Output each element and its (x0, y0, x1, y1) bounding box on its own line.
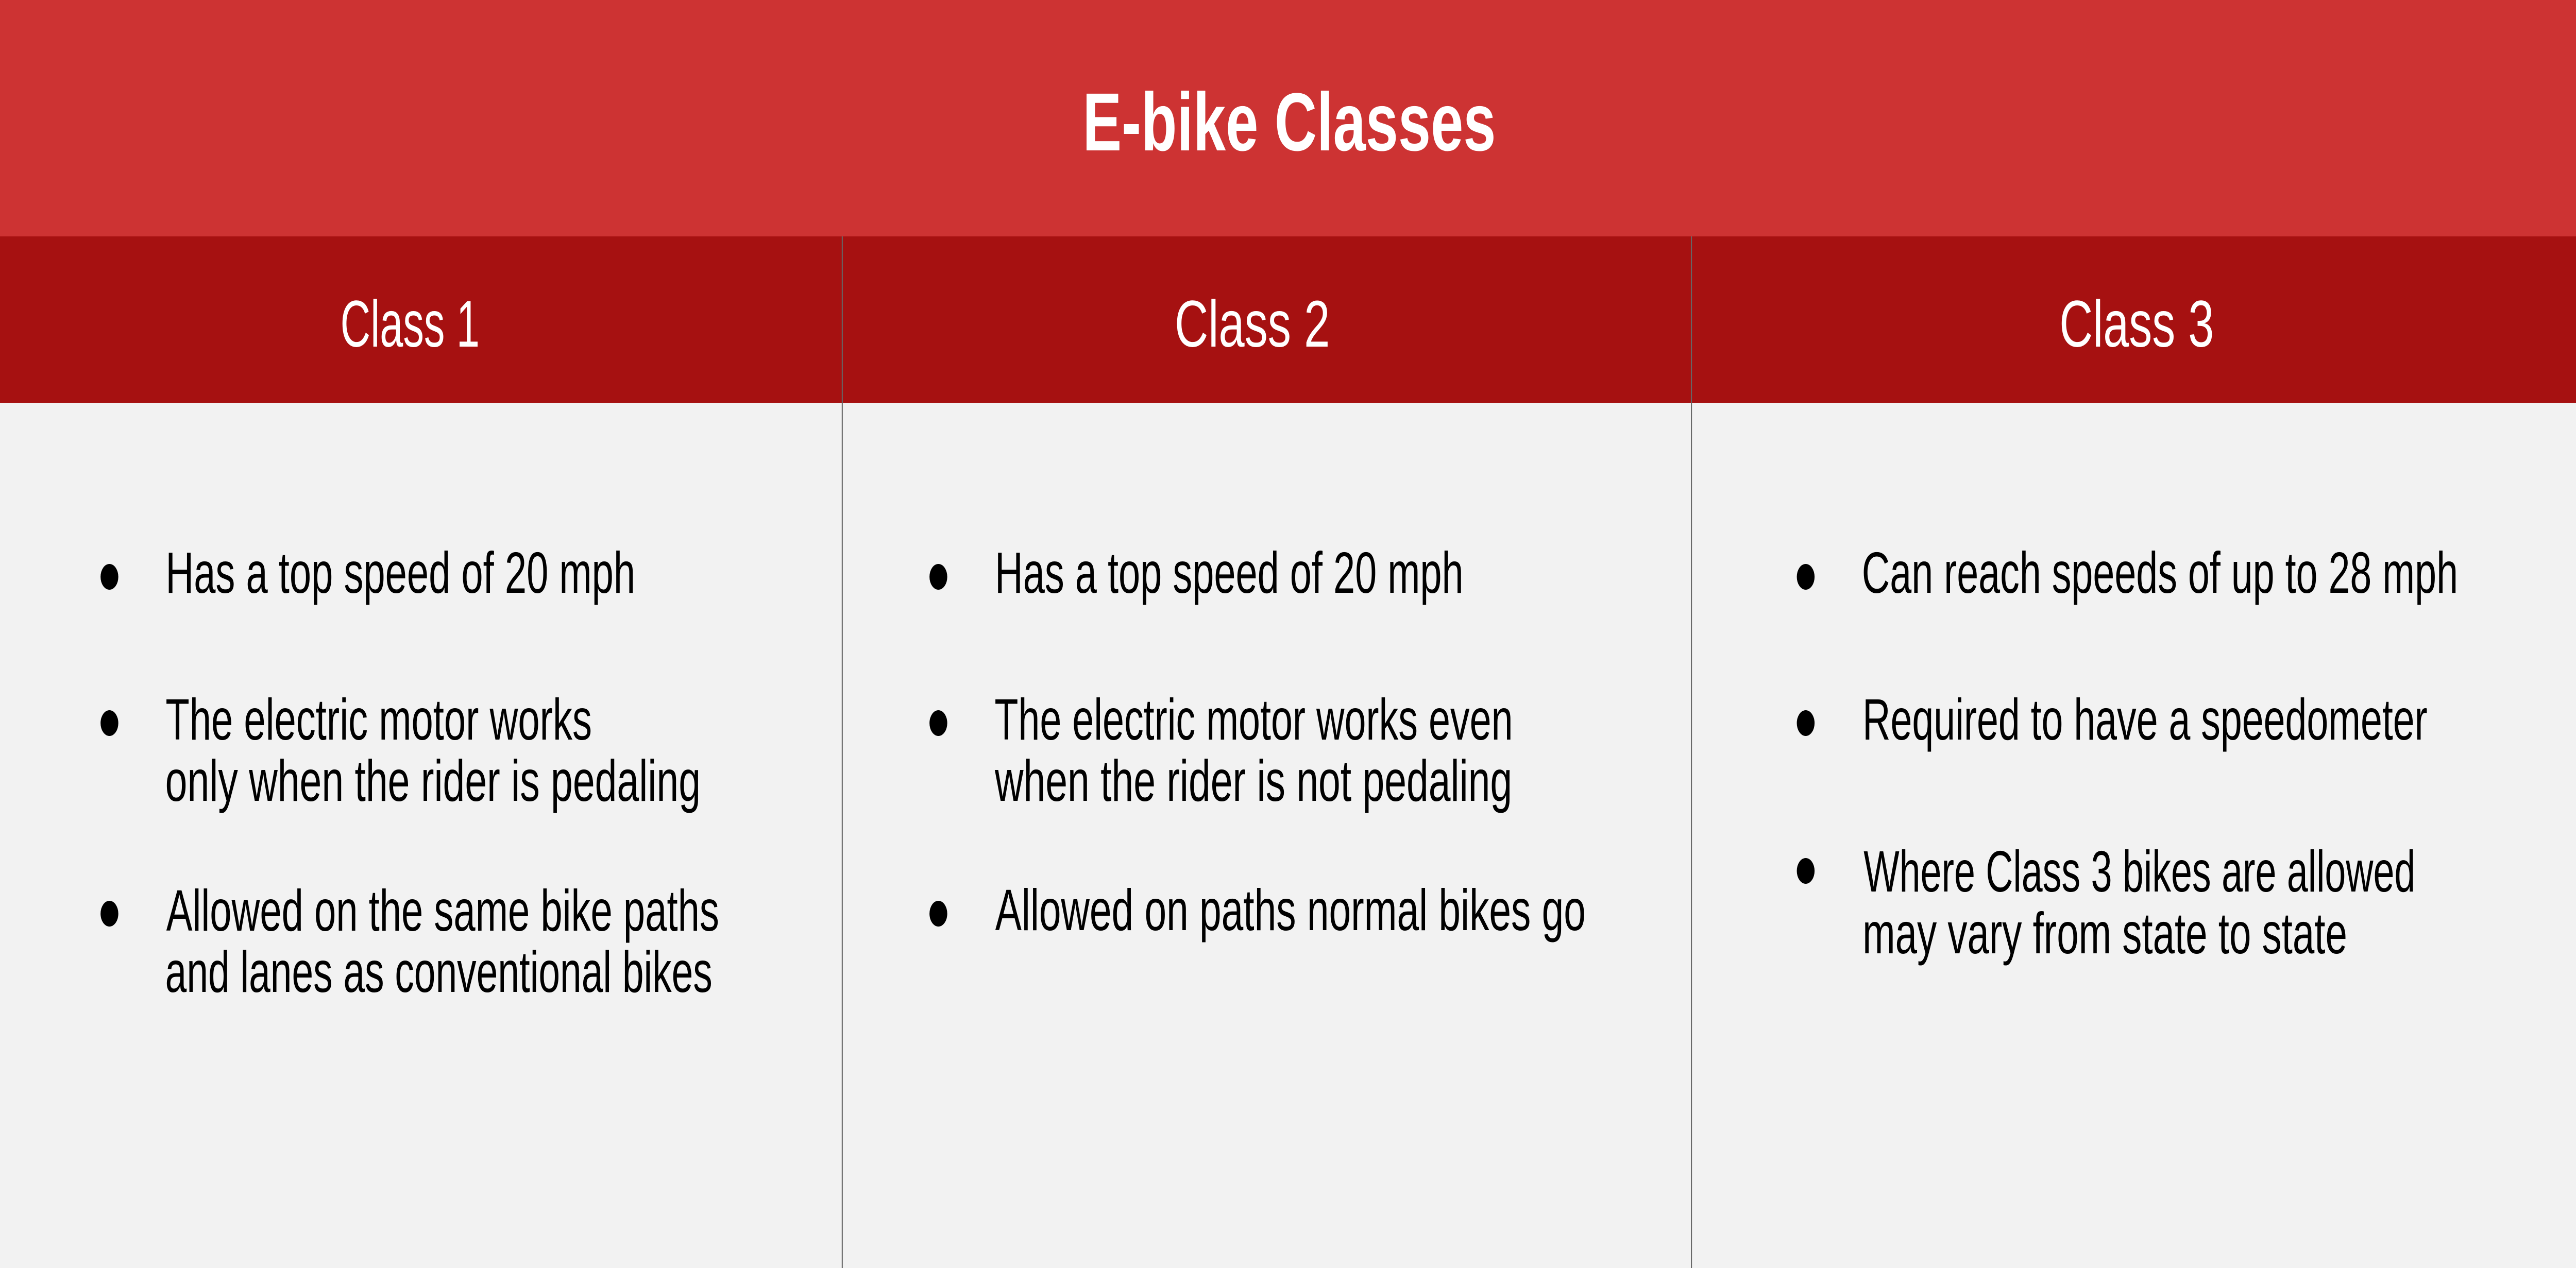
bullet: electric motor: when the rider is not pedaling (994, 748, 1512, 813)
bullet: speedometer: Required to have a speedometer (1862, 687, 2428, 752)
bullet: electric motor: The electric motor works (165, 687, 592, 752)
heading: Class 1: Class 1 (341, 287, 480, 361)
bullet: electric motor: The electric motor works even (994, 687, 1513, 752)
panel: Class 2 list (929, 540, 1586, 943)
bullet: allowed paths: and lanes as conventional bikes (165, 939, 713, 1004)
bullet: electric motor: only when the rider is pedaling (165, 748, 701, 813)
bullet: top speed: Has a top speed of 20 mph (165, 540, 635, 605)
panel: Class 1 list (100, 540, 719, 1004)
heading: Class 3: Class 3 (2059, 287, 2214, 361)
bullet: electric motor (929, 687, 1513, 813)
bullet: state variation (1797, 839, 2415, 966)
panel: Class 3 list (1797, 540, 2458, 966)
title banner (0, 0, 2576, 236)
bullet: electric motor (100, 687, 701, 813)
bullet: state variation: may vary from state to state (1862, 901, 2347, 966)
bullet: allowed paths (100, 878, 719, 1004)
heading: Class 2: Class 2 (1175, 287, 1330, 361)
header band: class names (0, 236, 2576, 403)
bullet: top speed: Can reach speeds of up to 28 mph (1862, 540, 2458, 605)
bullet: top speed: Has a top speed of 20 mph (995, 540, 1464, 605)
bullet: state variation: Where Class 3 bikes are allowed (1863, 839, 2415, 904)
title: E-bike Classes (1082, 77, 1496, 168)
bullet: allowed paths: Allowed on paths normal bikes go (995, 878, 1586, 943)
bullet: allowed paths: Allowed on the same bike paths (166, 878, 719, 943)
